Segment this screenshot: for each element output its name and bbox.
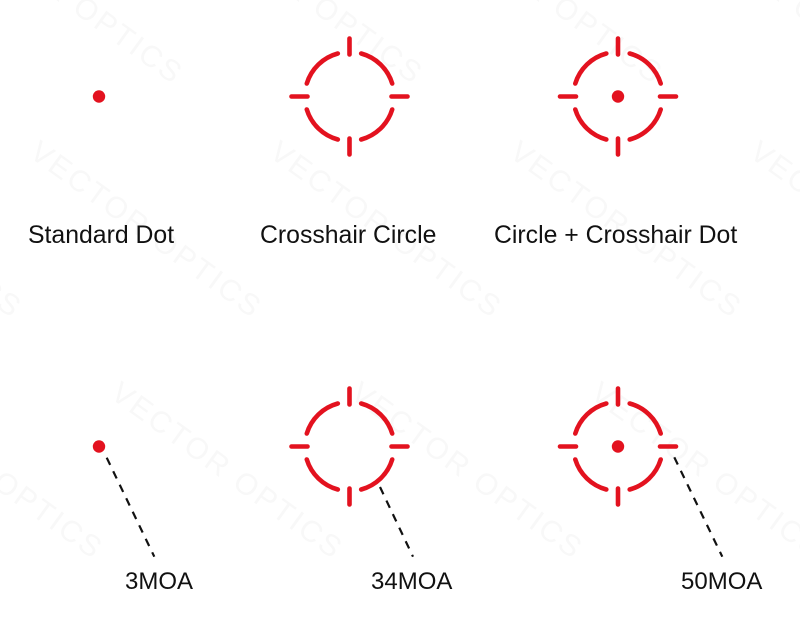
watermarks: VECTOR OPTICS [24,135,268,325]
icon: crosshair circle reticle [292,38,408,154]
watermarks: VECTOR OPTICS [264,135,508,325]
dashed leader: 34MOA [380,487,413,557]
label: Circle + Crosshair Dot: Circle + Crosshair Dot [494,222,737,249]
watermarks: VECTOR OPTICS [504,135,748,325]
label: 50MOA: 50MOA [681,568,762,595]
dashed leader: 50MOA [674,457,722,557]
icon: 50MOA circle with dot [560,388,676,504]
icon: standard dot reticle [93,90,105,103]
label: 3MOA: 3MOA [125,568,193,595]
dashed leader: 3MOA [107,458,154,557]
icon: 3MOA dot [93,440,105,453]
watermarks: VECTOR OPTICS [105,376,349,566]
label: Standard Dot: Standard Dot [28,222,174,249]
icon: 34MOA crosshair circle [292,388,408,504]
label: Crosshair Circle: Crosshair Circle [260,222,436,249]
label: 34MOA: 34MOA [371,568,452,595]
watermarks: VECTOR OPTICS [345,376,589,566]
icon: circle and crosshair dot reticle [560,38,676,154]
